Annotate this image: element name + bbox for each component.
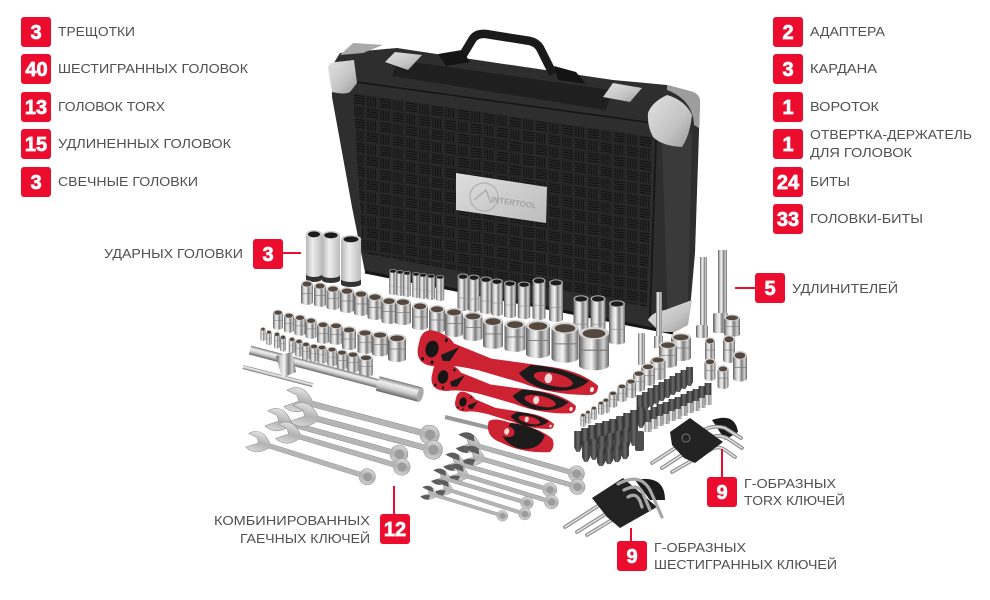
- item: spark plug sockets: СВЕЧНЫЕ ГОЛОВКИ: [58, 174, 198, 189]
- item: adapters: 2: [782, 22, 794, 44]
- case: [328, 34, 700, 333]
- callout: torx keys: 9: [716, 482, 728, 504]
- hex L-key set: [565, 478, 665, 535]
- item: deep sockets: 15: [25, 134, 47, 156]
- callout: torx keys: [707, 449, 845, 508]
- item: hex sockets: 40: [25, 59, 48, 81]
- callout: extensions: 5: [764, 278, 776, 300]
- callout: combination wrenches: ГАЕЧНЫХ КЛЮЧЕЙ: [240, 531, 370, 546]
- item: spark plug sockets: 3: [30, 172, 42, 194]
- callout: combination wrenches: [214, 486, 410, 546]
- item: adapters: АДАПТЕРА: [810, 24, 885, 39]
- right list: [773, 17, 972, 234]
- standard sockets row: [301, 280, 609, 370]
- case handle: [438, 34, 586, 84]
- T-handle extension bar: [242, 343, 425, 403]
- item: T-handle: 1: [782, 97, 794, 119]
- callout: hex keys: ШЕСТИГРАННЫХ КЛЮЧЕЙ: [654, 557, 837, 572]
- callout: hex keys: 9: [626, 546, 638, 568]
- item: deep sockets: [21, 129, 231, 159]
- deep sockets: [389, 269, 625, 344]
- item: bits: 24: [777, 172, 800, 194]
- small sockets row: [260, 327, 373, 377]
- ratchets: [415, 328, 602, 434]
- callout: impact sockets: УДАРНЫХ ГОЛОВКИ: [104, 246, 243, 261]
- callout: combination wrenches: 12: [384, 519, 406, 541]
- screwdriver bits: [574, 367, 711, 466]
- callout: hex keys: [617, 528, 837, 572]
- case latches: [385, 52, 642, 102]
- combination wrenches, right group: [419, 430, 587, 524]
- callout: impact sockets: 3: [262, 244, 274, 266]
- case name plate: [456, 173, 547, 223]
- combination wrenches, left group: [244, 385, 445, 489]
- item: ratchets: [21, 17, 135, 47]
- item: bits: БИТЫ: [810, 174, 850, 189]
- callout: torx keys: Г-ОБРАЗНЫХ: [744, 476, 836, 491]
- item: torx sockets: [21, 92, 165, 122]
- item: T-handle: [773, 92, 879, 122]
- callout: torx keys: TORX КЛЮЧЕЙ: [744, 493, 845, 508]
- medium sockets row: [273, 310, 406, 362]
- item: bit sockets: 33: [777, 209, 799, 231]
- item: cardans: 3: [782, 59, 794, 81]
- screwdriver: [445, 417, 557, 457]
- torx L-key set: [652, 418, 742, 472]
- case name plate: INTERTOOL: [491, 195, 538, 211]
- callout: hex keys: Г-ОБРАЗНЫХ: [654, 540, 746, 555]
- callout: extensions: [735, 273, 898, 303]
- item: cardans: [773, 54, 877, 84]
- item: bit holder screwdriver: [773, 127, 972, 160]
- case corners: [328, 43, 700, 332]
- item: cardans: КАРДАНА: [810, 61, 877, 76]
- item: ratchets: 3: [30, 22, 42, 44]
- item: bit holder screwdriver: 1: [782, 134, 794, 156]
- item: deep sockets: УДЛИНЕННЫХ ГОЛОВОК: [58, 136, 231, 151]
- item: torx sockets: ГОЛОВОК TORX: [58, 99, 165, 114]
- item: torx sockets: 13: [25, 97, 47, 119]
- callout: impact sockets: [104, 239, 301, 269]
- callout: extensions: УДЛИНИТЕЛЕЙ: [792, 281, 898, 296]
- item: adapters: [773, 17, 885, 47]
- callout: combination wrenches: КОМБИНИРОВАННЫХ: [214, 513, 370, 528]
- item: bit holder screwdriver: ОТВЕРТКА-ДЕРЖАТЕЛЬ: [810, 127, 972, 142]
- item: bit sockets: ГОЛОВКИ-БИТЫ: [810, 211, 923, 226]
- item: bit holder screwdriver: ДЛЯ ГОЛОВОК: [810, 145, 912, 160]
- left list: [21, 17, 248, 197]
- item: hex sockets: [21, 54, 248, 84]
- item: spark plug sockets: [21, 167, 198, 197]
- item: ratchets: ТРЕЩОТКИ: [58, 24, 135, 39]
- item: T-handle: ВОРОТОК: [810, 99, 879, 114]
- item: bits: [773, 167, 850, 197]
- extension bars and adapters: [638, 250, 747, 389]
- item: hex sockets: ШЕСТИГРАННЫХ ГОЛОВОК: [58, 61, 248, 76]
- item: bit sockets: [773, 204, 923, 234]
- sockets next to bits: [580, 333, 691, 427]
- impact sockets: [306, 230, 361, 287]
